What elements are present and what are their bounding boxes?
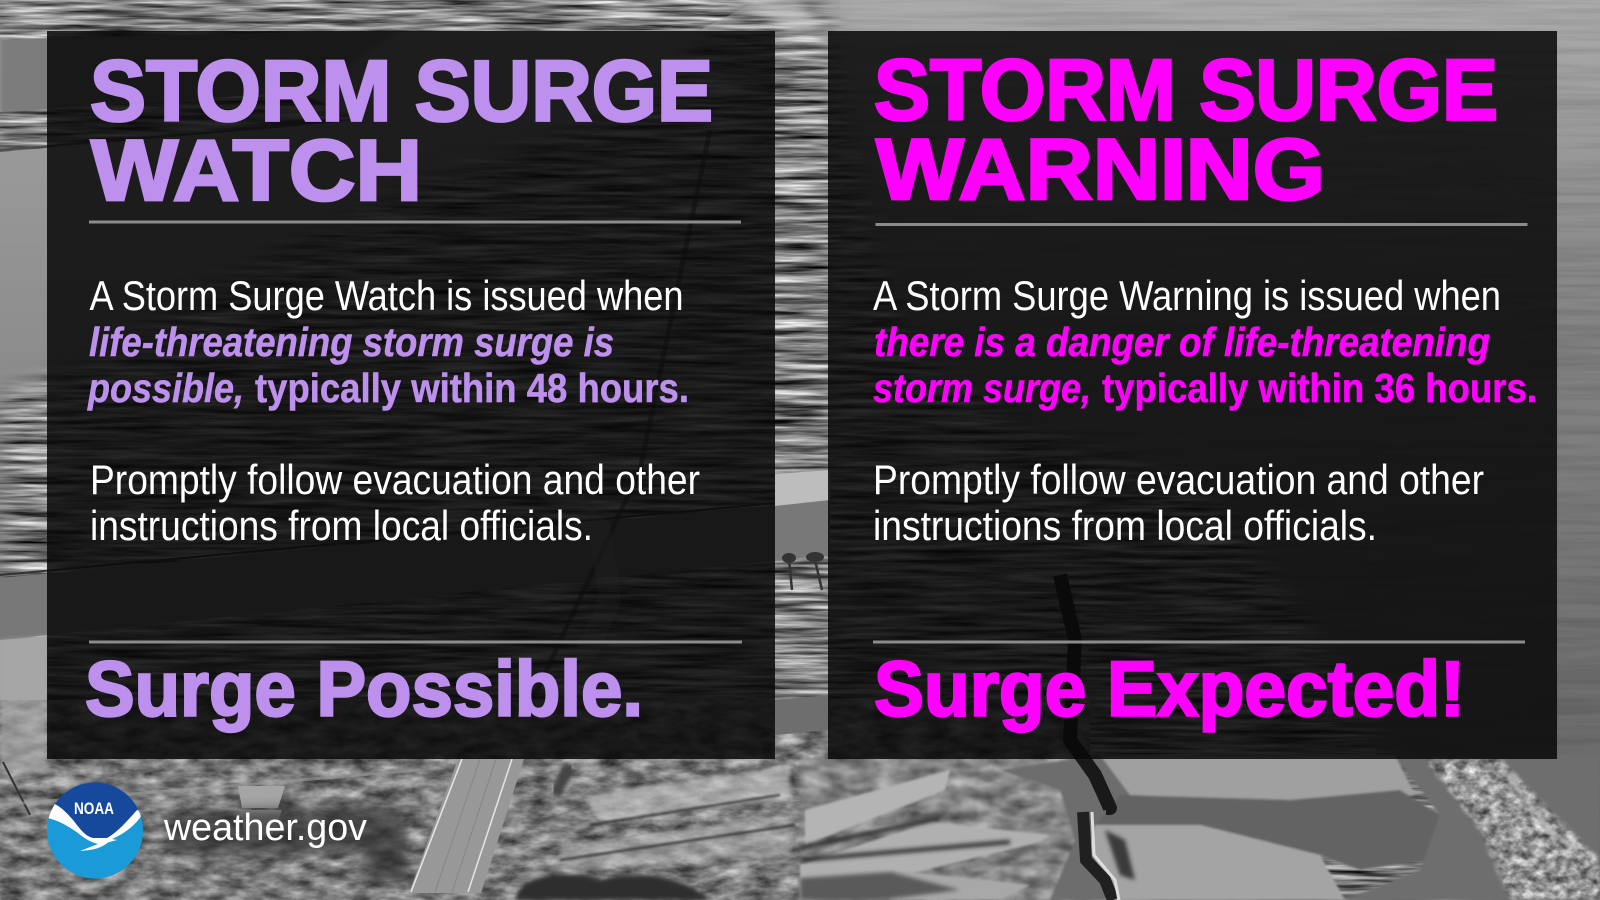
road under panel [505, 130, 710, 759]
heading: storm surge warning: WARNING [876, 122, 1325, 218]
panel: storm surge watch [47, 31, 775, 759]
callout: surge expected: Surge Expected! [874, 644, 1465, 732]
heading: storm surge watch: WATCH [91, 123, 422, 219]
jetty [1060, 575, 1135, 900]
heading: storm surge warning: STORM SURGE [874, 42, 1498, 138]
sandbars and inlet [800, 755, 1600, 900]
text block: watch definition [87, 272, 689, 411]
text block: warning definition: storm surge, [873, 365, 1091, 411]
heading: storm surge warning [874, 42, 1498, 218]
text block: warning definition: A Storm Surge Warning is issued when [873, 272, 1501, 319]
text block: warning definition: typically within 36 hours. [1102, 365, 1537, 411]
palm trees [782, 552, 824, 590]
text block: watch instructions: Promptly follow evacuation and other [90, 456, 700, 503]
text block: watch definition: typically within 48 hours. [255, 365, 689, 411]
text block: warning definition [873, 272, 1537, 411]
icon: NOAA logo: NOAA [74, 799, 114, 818]
wordmark: weather.gov: weather.gov [163, 807, 367, 849]
text block: watch instructions: instructions from local officials. [90, 502, 593, 549]
text block: warning instructions: instructions from local officials. [873, 502, 1377, 549]
text block: watch definition: A Storm Surge Watch is issued when [90, 272, 684, 319]
text block: warning instructions: Promptly follow evacuation and other [873, 456, 1484, 503]
text block: warning instructions [873, 456, 1484, 549]
dark patch behind wordmark [165, 805, 412, 885]
road [409, 759, 524, 893]
ground, lower left [0, 636, 1090, 900]
icon: NOAA logo [47, 782, 143, 878]
text block: watch definition: life-threatening storm surge is [89, 319, 614, 365]
surf zone [1428, 759, 1600, 900]
text block: watch definition: possible, [87, 365, 244, 411]
lower waterway [0, 500, 830, 640]
text block: warning definition: there is a danger of life-threatening [874, 319, 1490, 365]
damaged land, right of road [515, 765, 795, 900]
panel: storm surge warning [828, 31, 1557, 759]
heading: storm surge watch: STORM SURGE [90, 44, 713, 140]
text block: watch instructions [90, 456, 700, 549]
heading: storm surge watch [90, 44, 713, 219]
callout: surge possible: Surge Possible. [85, 644, 643, 732]
